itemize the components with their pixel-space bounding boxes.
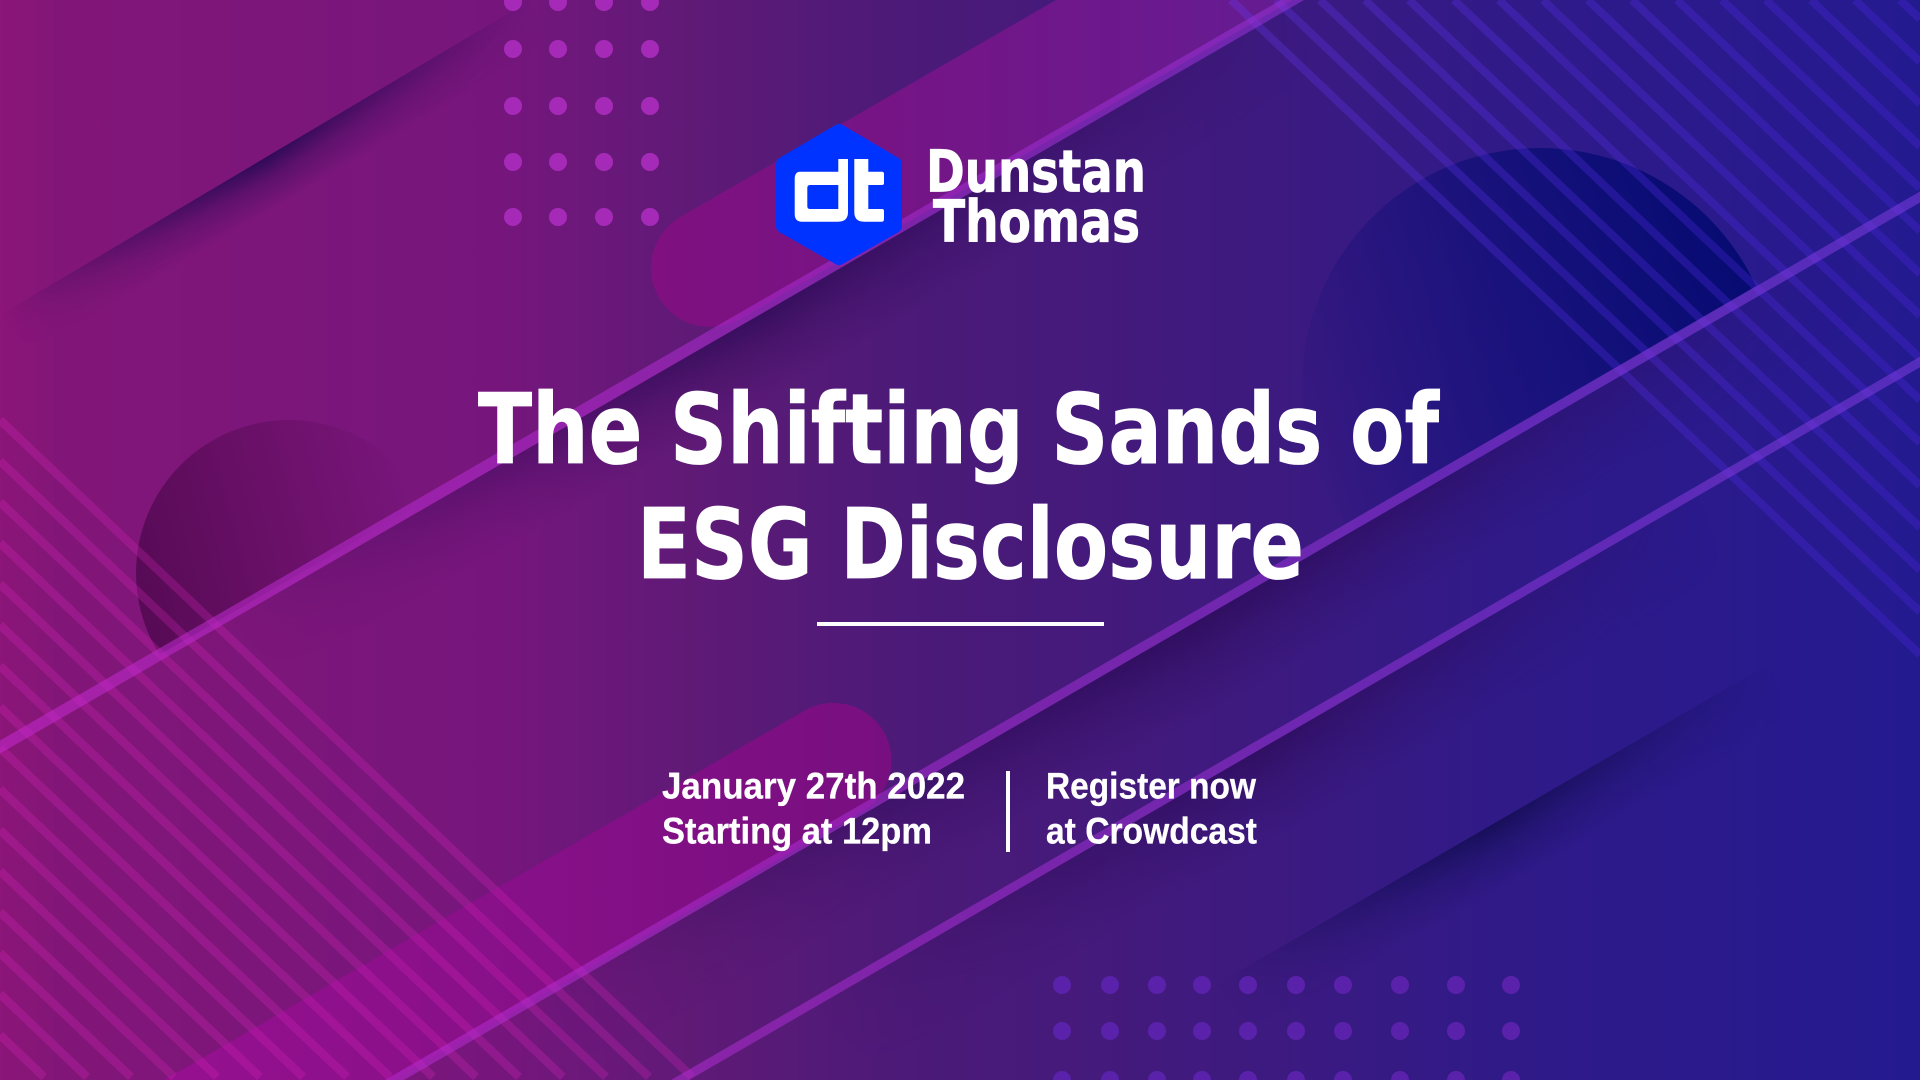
logo (783, 131, 1146, 258)
icon: hexagon with dt mark (783, 131, 895, 258)
event date and time: January 27th 2022 (662, 766, 965, 806)
registration call to action: at Crowdcast (1046, 810, 1257, 852)
dots top (504, 0, 659, 226)
registration call to action (1046, 766, 1257, 852)
title: ESG Disclosure (637, 488, 1304, 601)
logo wordmark: Thomas (933, 189, 1140, 256)
title underline (817, 622, 1104, 626)
logo wordmark: Dunstan (926, 139, 1146, 206)
lower rounded pill (164, 703, 892, 1080)
title: The Shifting Sands of (478, 373, 1440, 486)
stripes top right (1231, 0, 1920, 655)
event date and time (662, 766, 965, 852)
title (478, 373, 1440, 601)
logo wordmark (926, 139, 1146, 256)
top rounded pill (651, 0, 1292, 327)
event date and time: Starting at 12pm (662, 810, 932, 852)
vertical divider (1006, 771, 1010, 852)
dots bottom (1053, 976, 1520, 1080)
registration call to action: Register now (1046, 766, 1256, 806)
stripes bottom left (0, 420, 692, 1077)
dark circle left (136, 420, 360, 654)
diagonal shadows (26, 18, 1728, 954)
dark circle right (1315, 148, 1756, 494)
